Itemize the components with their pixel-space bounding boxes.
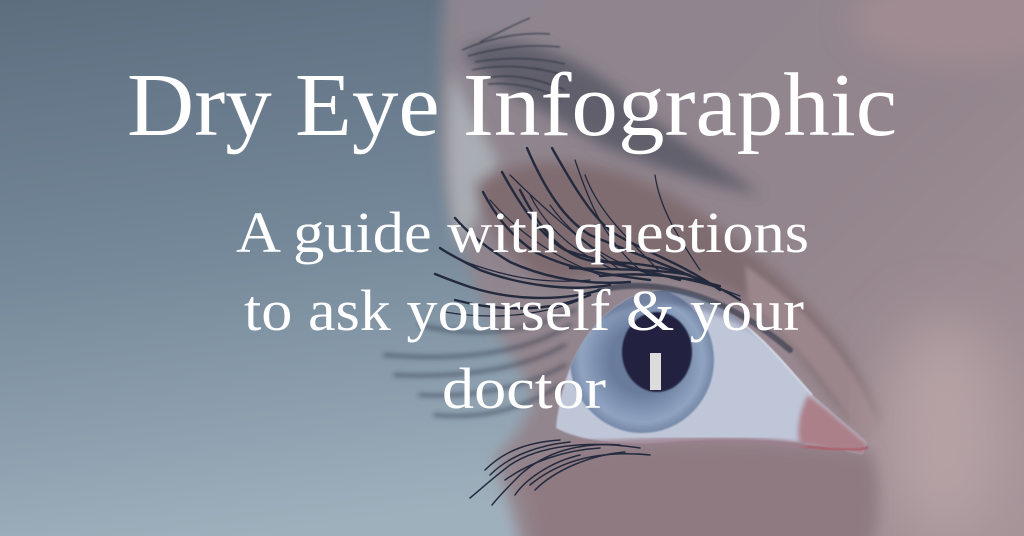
subtitle line 3: doctor (442, 356, 606, 421)
photo: lighter brow bone highlight (447, 70, 498, 245)
pupil (622, 312, 692, 392)
pupil highlight (650, 353, 661, 390)
photo: face skin (441, 0, 1024, 536)
photo: pink tint top right (850, 0, 1024, 65)
photo: eyelid crease (745, 265, 878, 442)
caruncle (798, 395, 868, 456)
photo: lower lid (520, 442, 878, 536)
photo: upper cheek tone (885, 320, 1005, 536)
title: Dry Eye Infographic (127, 56, 897, 155)
sclera (556, 290, 866, 454)
iris (570, 287, 714, 433)
subtitle line 2: to ask yourself & your (244, 278, 804, 343)
photo: upper eyelashes (385, 148, 790, 416)
lower lid rim (575, 440, 805, 446)
photo: eyebrow (462, 18, 760, 195)
photo: eye (556, 283, 868, 456)
subtitle line 1: A guide with questions (236, 200, 809, 265)
photo: lower eyelashes (470, 440, 650, 505)
photo: eyelid shading (475, 162, 880, 424)
lid rim (744, 325, 812, 395)
tear duct rim (800, 446, 868, 450)
subtitle (236, 200, 809, 421)
upper lid shadow (602, 290, 754, 335)
